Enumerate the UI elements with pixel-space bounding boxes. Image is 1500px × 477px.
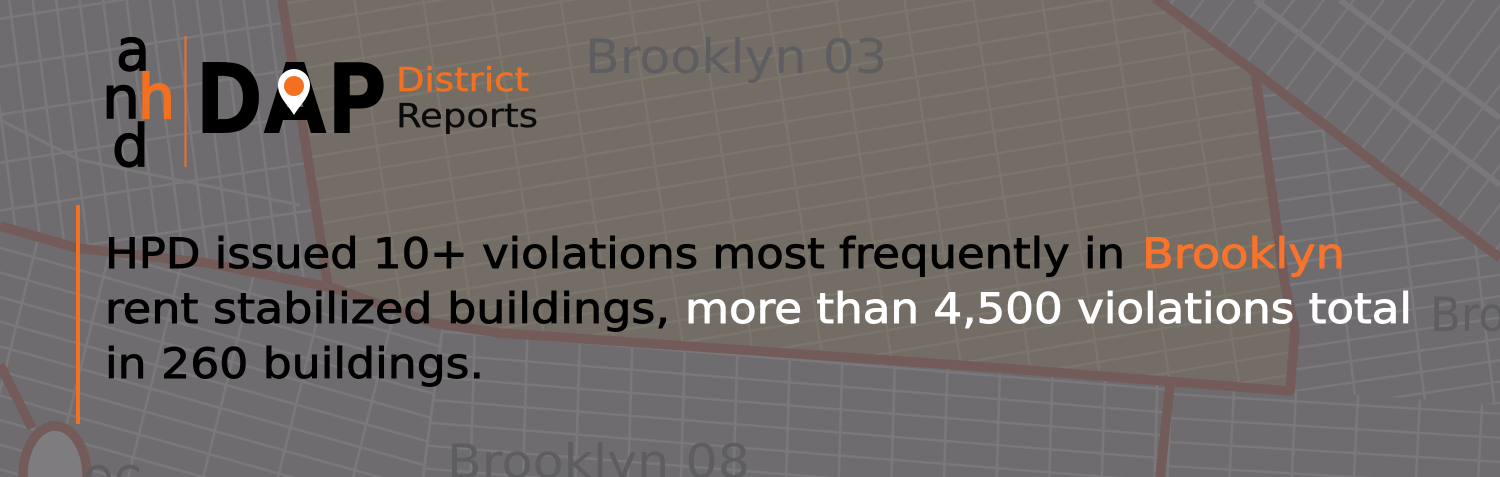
- logo letter: orange h: h: [138, 62, 175, 133]
- headline text block: [105, 229, 1412, 388]
- line 2: rent stabilized buildings,: [105, 284, 670, 333]
- accent bar: [76, 205, 80, 424]
- logo text: Reports: Reports: [396, 96, 538, 135]
- logo: and-h DAP District Reports: [102, 16, 538, 180]
- logo divider: [184, 36, 186, 167]
- line 3: in 260 buildings.: [105, 339, 484, 388]
- logo letters: and: d: [112, 112, 149, 180]
- icon: map pin: [278, 69, 310, 115]
- line 1: HPD issued 10+ violations most frequently in: [105, 229, 1125, 278]
- highlighted district: Brooklyn 03: [282, 0, 1295, 390]
- logo letters: and: [102, 16, 150, 180]
- logo letters: and: a: [116, 16, 150, 84]
- highlight: Brooklyn: Brooklyn: [1142, 229, 1345, 278]
- logo wordmark: DAP: DAP: [195, 43, 387, 156]
- logo text: District: District: [396, 60, 529, 99]
- logo letters: and: n: [102, 64, 140, 132]
- highlight: violations total: more than 4,500 violations total: [685, 284, 1412, 333]
- map label: Brooklyn 03: Brooklyn 03: [585, 30, 887, 85]
